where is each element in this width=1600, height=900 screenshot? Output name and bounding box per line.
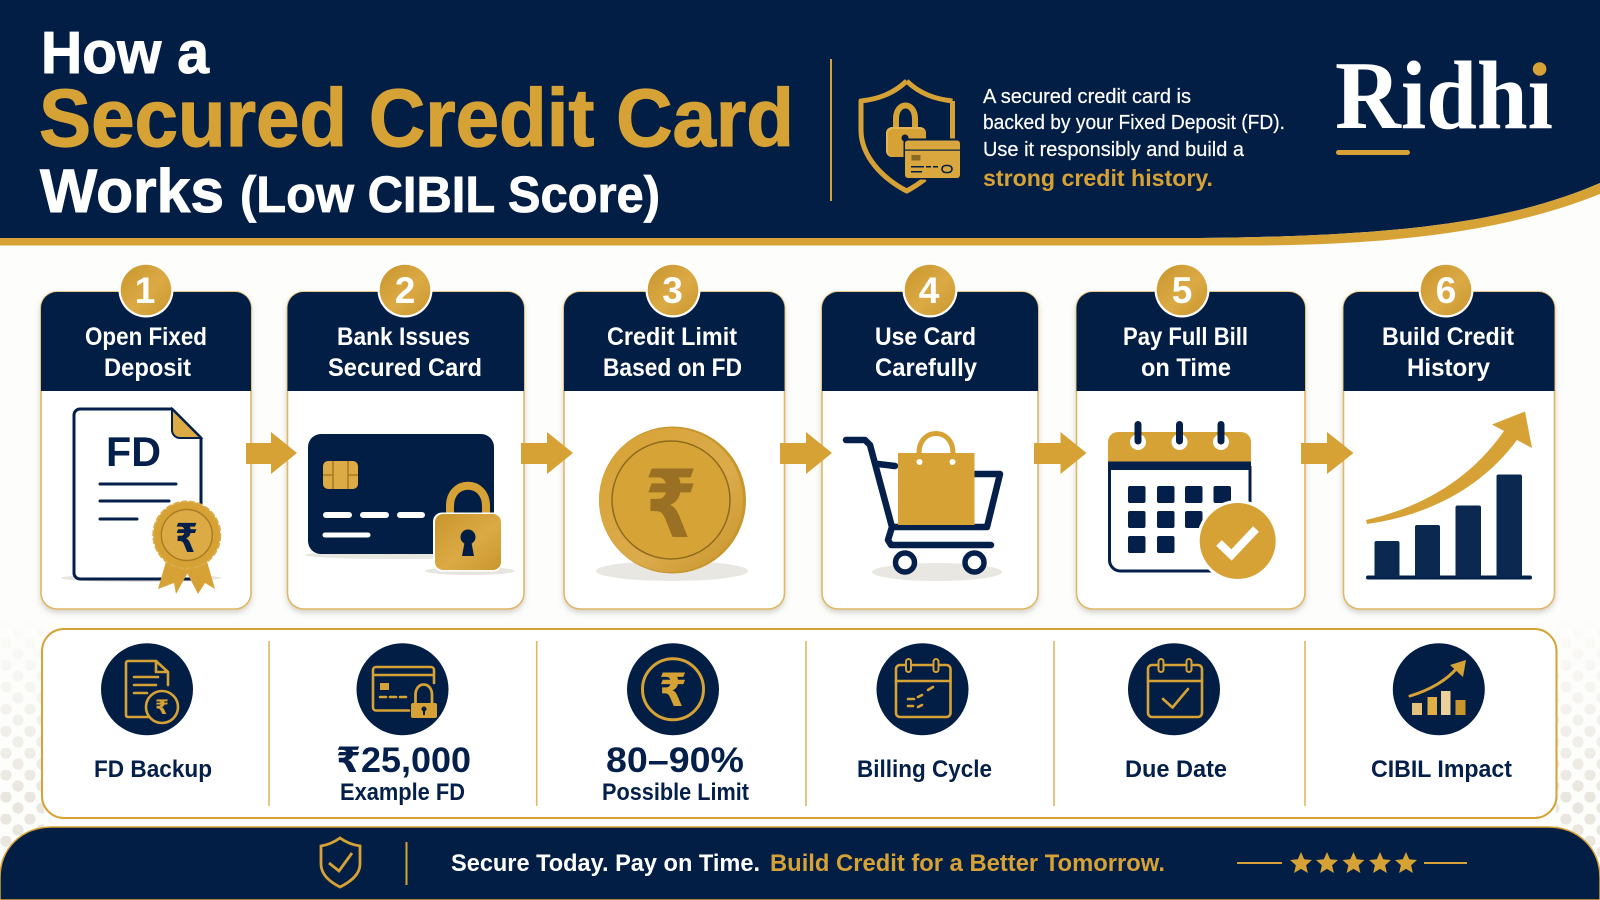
step 3 title [603, 323, 742, 382]
fact: billing cycle [857, 643, 992, 783]
fact: example FD amount: ₹25,000 [336, 741, 471, 780]
fact: FD Backup: ₹ [155, 697, 169, 719]
icon: shopping cart with bag [846, 434, 1002, 581]
step number 2: 2 [395, 270, 415, 311]
icon: secured card with padlock [305, 434, 515, 575]
header banner [0, 0, 1600, 246]
title [39, 20, 794, 225]
fact: possible limit: Possible Limit [602, 779, 749, 806]
step 1 title: Open Fixed [85, 323, 207, 351]
title: (Low CIBIL Score) [240, 166, 660, 223]
description text: A secured credit card is [983, 86, 1191, 108]
step 5 card [1076, 262, 1305, 609]
step number 5: 5 [1172, 270, 1192, 311]
step 4 title [875, 323, 977, 382]
step 6 title: History [1407, 354, 1490, 382]
icon: growth bar chart with arrow [1366, 412, 1532, 578]
step number 4: 4 [919, 270, 940, 311]
step number 3: 3 [662, 270, 683, 311]
logo: Ridhi: Ridhi [1335, 42, 1553, 150]
arrow 2 [521, 432, 573, 474]
step 5 title [1123, 323, 1248, 382]
panel: key facts strip [42, 629, 1556, 818]
step 3 card [564, 262, 784, 609]
step 4 title: Carefully [875, 354, 977, 382]
step 4 title: Use Card [875, 323, 976, 351]
step 6 title [1382, 323, 1515, 382]
step 3 title: Credit Limit [607, 323, 738, 351]
fact: possible limit: 80–90% [606, 741, 744, 780]
fact: example FD amount [336, 643, 471, 806]
step number 1: 1 [135, 270, 155, 311]
step number 6: 6 [1436, 270, 1456, 311]
step 6 title: Build Credit [1382, 323, 1515, 351]
fact: billing cycle: Billing Cycle [857, 756, 992, 783]
arrow 1 [246, 432, 297, 474]
icon: calendar with check [1108, 424, 1279, 582]
arrow 4 [1034, 432, 1086, 474]
fact: FD Backup [94, 643, 212, 783]
description text: Use it responsibly and build a [983, 139, 1245, 161]
description text: backed by your Fixed Deposit (FD). [983, 112, 1285, 134]
fact: due date [1125, 643, 1227, 783]
icon: FD document with rupee medal [61, 409, 221, 594]
step 4 card [822, 262, 1038, 609]
footer slogan: Build Credit for a Better Tomorrow. [770, 850, 1165, 877]
description text [983, 86, 1285, 191]
icon: rupee coin [596, 426, 748, 581]
step 2 title [328, 323, 482, 382]
footer banner [0, 827, 1600, 900]
description text: strong credit history. [983, 165, 1213, 191]
footer slogan [451, 850, 1165, 877]
step number 5 [1154, 262, 1210, 318]
fact: CIBIL impact: CIBIL Impact [1371, 756, 1512, 783]
step number 2 [378, 262, 432, 318]
step number 6 [1418, 262, 1474, 318]
title: Works [40, 157, 224, 225]
step number 4 [902, 262, 958, 318]
step 1 title [85, 323, 207, 382]
arrow 5 [1301, 432, 1354, 474]
step 2 title: Bank Issues [337, 323, 470, 351]
five star rating [1237, 852, 1467, 873]
fact: due date: Due Date [1125, 756, 1227, 783]
step 5 title: Pay Full Bill [1123, 323, 1248, 351]
step 2 card [288, 262, 524, 609]
arrow 3 [780, 432, 832, 474]
fact: FD Backup: FD Backup [94, 756, 212, 783]
title: Secured Credit Card [39, 73, 794, 164]
footer slogan: Secure Today. Pay on Time. [451, 850, 760, 877]
icon: footer shield check [321, 838, 360, 887]
step number 1 [118, 262, 174, 318]
step number 3 [646, 262, 700, 318]
fact: possible limit: ₹ [659, 664, 687, 716]
fact: CIBIL impact [1371, 643, 1512, 783]
step 3 title: Based on FD [603, 354, 742, 382]
step 6 card [1344, 262, 1554, 609]
step 1 title: Deposit [104, 354, 192, 382]
title: How a [41, 20, 210, 86]
fact: possible limit [602, 643, 749, 806]
fact: example FD amount: Example FD [340, 779, 465, 806]
icon: FD document with rupee medal: ₹ [175, 517, 198, 561]
step 5 title: on Time [1141, 354, 1231, 382]
icon: shield with lock and card [861, 81, 968, 191]
icon: rupee coin: ₹ [644, 452, 698, 557]
step 2 title: Secured Card [328, 354, 482, 382]
icon: FD document with rupee medal: FD [106, 428, 161, 475]
step 1 card [41, 262, 251, 609]
